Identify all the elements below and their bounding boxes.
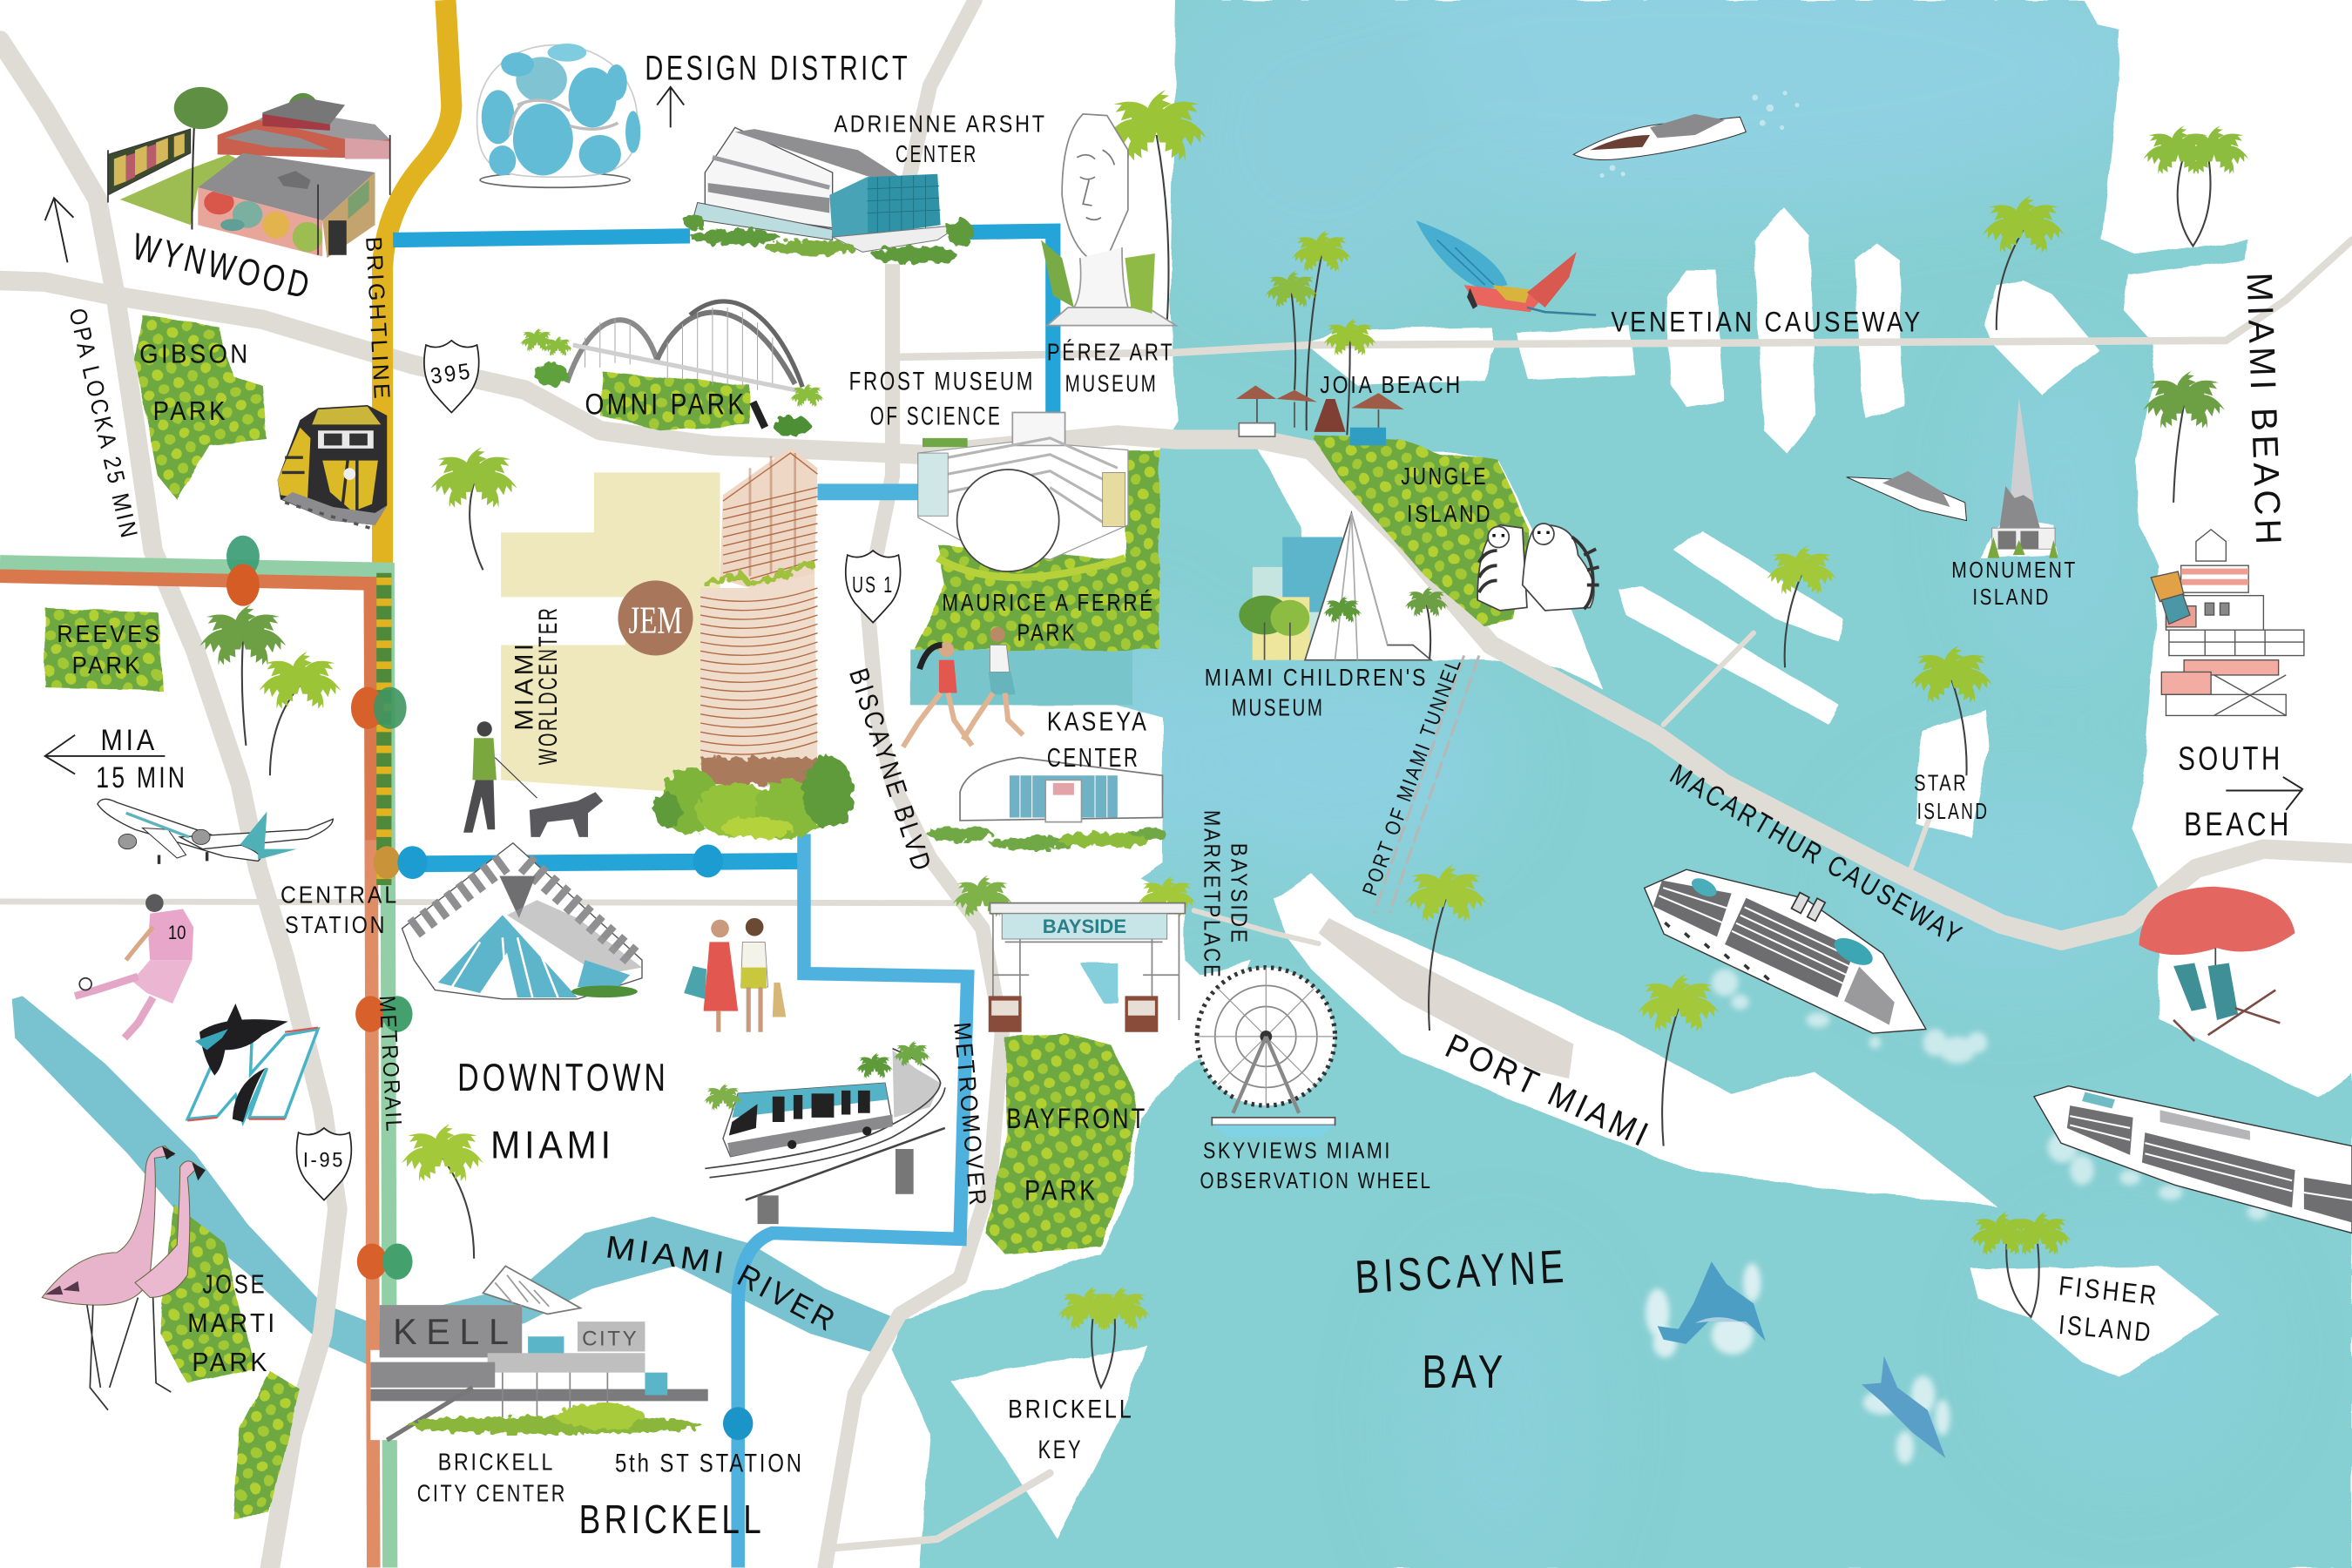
road: NE 1st street: [0, 902, 960, 903]
icon: yacht splash: [1599, 91, 1799, 178]
letter M: [187, 1029, 318, 1122]
label: Bayside Marketplace: BAYSIDE: [1227, 843, 1251, 945]
shield: I-95: I-95: [303, 1149, 345, 1173]
Maurice A Ferre Park: [914, 450, 1159, 650]
label: Wynwood: WYNWOOD: [129, 226, 316, 308]
label: Bayside Marketplace: MARKETPLACE: [1200, 810, 1224, 979]
label: Fisher Island: FISHER: [2058, 1270, 2160, 1311]
label: South Beach: BEACH: [2184, 807, 2292, 843]
shield: US 1: US 1: [852, 573, 894, 598]
Jose Marti Park: [160, 1203, 255, 1383]
Metrorail orange upper: [0, 576, 372, 840]
icon: Children's Museum: [1239, 513, 1431, 660]
label: Bayfront Park: [1006, 1102, 1147, 1206]
icon: JEM tower: [700, 447, 817, 765]
icon: beach umbrella and chairs: [2139, 887, 2295, 1041]
Port of Miami tunnel: [1374, 656, 1479, 914]
icon: lemurs: [1477, 524, 1599, 611]
panel: station dots: [226, 536, 753, 1440]
icon: Joia Beach cabanas: [1236, 386, 1404, 445]
label: Miami Worldcenter: WORLDCENTER: [535, 606, 563, 765]
label: Monument Island: MONUMENT: [1951, 558, 2078, 583]
label: Central Station: [280, 882, 399, 938]
label: Skyviews Miami Observation Wheel: OBSERVATION WHEEL: [1200, 1169, 1432, 1193]
icon: Frost Museum of Science: [918, 413, 1128, 578]
Metromover spur: [817, 487, 918, 497]
label: Central Station: CENTRAL: [280, 882, 399, 909]
label: Reeves Park: PARK: [72, 652, 143, 679]
icon: shoppers: [684, 918, 786, 1032]
label: Miami Worldcenter: MIAMI: [510, 640, 538, 731]
label: Bayfront Park: PARK: [1024, 1174, 1098, 1206]
icon: JEM logo badge: [618, 580, 693, 656]
label: MIA 15 min: MIA: [100, 724, 158, 757]
label: Brickell: BRICKELL: [579, 1497, 765, 1542]
label: Maurice A Ferre Park: MAURICE A FERRÉ: [942, 589, 1155, 616]
label: Reeves Park: REEVES: [57, 620, 162, 647]
label: Perez Art Museum: [1047, 338, 1174, 396]
marlin spear: [233, 1068, 266, 1122]
engines: [118, 829, 210, 849]
label: Design District: DESIGN DISTRICT: [645, 49, 910, 87]
label: Fisher Island: [2058, 1270, 2160, 1348]
label: Miami Worldcenter: [510, 606, 563, 765]
icon: Brightline train: [278, 405, 387, 530]
label: Gibson Park: GIBSON: [139, 339, 251, 369]
kicking leg: [75, 977, 138, 996]
Jose Marti Park south: [233, 1371, 300, 1518]
icon: Bayside Marketplace gate: BAYSIDE: [1043, 916, 1126, 937]
label: Brickell Key: BRICKELL: [1008, 1396, 1134, 1423]
arrow: South Beach east: [2226, 777, 2302, 810]
icon: soccer player: [75, 894, 193, 1038]
label: Gibson Park: [139, 339, 251, 426]
label: Maurice A Ferre Park: PARK: [1017, 618, 1077, 645]
top building: [262, 98, 345, 125]
Monument Island: [1980, 517, 2058, 558]
label: Star Island: [1914, 771, 1989, 824]
label: Star Island: ISLAND: [1917, 800, 1989, 824]
main building mural wall: [198, 187, 322, 256]
mural fence: [108, 129, 191, 195]
marina water at Bayside: [1080, 963, 1118, 1002]
Bayfront Park: [985, 1033, 1136, 1254]
label: Downtown Miami: [457, 1056, 669, 1166]
shield: I-395: [424, 341, 479, 413]
head: [145, 894, 164, 912]
label: Miami River: [604, 1228, 844, 1340]
arrow: Design District north: [657, 87, 684, 127]
icon: Bayside Marketplace gate: [989, 903, 1185, 1032]
label: Perez Art Museum: PÉREZ ART: [1047, 338, 1174, 365]
label: Star Island: STAR: [1914, 771, 1968, 795]
road: Opa Locka / I-95: [0, 40, 337, 1567]
standing leg: [125, 997, 153, 1038]
icon: parrot: [1416, 220, 1596, 315]
icon: Design District fly dome: [477, 44, 640, 187]
panel: Biscayne Bay water: [893, 0, 2352, 1568]
label: Adrienne Arsht Center: ADRIENNE ARSHT: [834, 111, 1047, 138]
label: Jose Marti Park: MARTI: [187, 1308, 278, 1338]
icon: Metromover train: [704, 1040, 945, 1224]
label: South Beach: [2178, 740, 2292, 843]
icon: tower foliage: [654, 756, 854, 840]
label: Metromover: METROMOVER: [949, 1021, 992, 1209]
white base covering line: [690, 210, 960, 264]
Brightline shared dashes: [380, 578, 389, 885]
label: Jose Marti Park: JOSE: [202, 1268, 267, 1299]
icon: flamingos: [42, 1146, 206, 1410]
icon: diving dolphin: [1862, 1356, 1950, 1464]
landing gear: [159, 852, 207, 864]
label: MacArthur Causeway: MACARTHUR CAUSEWAY: [1665, 757, 1970, 952]
Port Miami island: [1274, 873, 1997, 1206]
panel: parks: [45, 315, 1529, 1518]
label: Jungle Island: ISLAND: [1407, 500, 1492, 527]
Reeves Park: [45, 607, 162, 690]
label: Metrorail: METRORAIL: [375, 995, 406, 1134]
icon: soccer player: 10: [168, 922, 186, 943]
road: Star Island bridge: [1911, 819, 1929, 868]
Gibson Park: [135, 315, 267, 499]
label: Monument Island: [1951, 558, 2078, 610]
label: Kaseya Center: [1047, 706, 1149, 773]
road: Port Boulevard: [1194, 910, 1319, 943]
teal tail: [240, 812, 267, 855]
icon: airplane: [98, 799, 333, 864]
pink jersey: [148, 909, 193, 960]
arm: [126, 927, 153, 960]
pillars: [758, 1149, 914, 1224]
icon: Kaseya Center arena: [927, 758, 1166, 850]
shield: I-395: 395: [429, 359, 474, 389]
Jungle Island: [1311, 435, 1529, 625]
teal waterway by runners: [910, 650, 1132, 705]
icon: cruise ship splashes: [1712, 969, 2268, 1220]
label: Brickell Key: KEY: [1038, 1436, 1083, 1464]
road: Venetian Causeway: [900, 240, 2352, 357]
icon: runners: [903, 627, 1023, 747]
label: MIA 15 min: 15 MIN: [96, 761, 187, 794]
icon: lifeguard tower: [2151, 530, 2304, 715]
Miami Worldcenter block: [501, 472, 720, 795]
Miami River: [12, 996, 900, 1367]
dorsal fin: [225, 1004, 245, 1026]
label: Joia Beach: JOIA BEACH: [1320, 371, 1463, 398]
label: Monument Island: ISLAND: [1972, 585, 2051, 610]
track: [705, 1049, 945, 1178]
label: MIA 15 min: [96, 724, 187, 794]
label: Venetian Causeway: VENETIAN CAUSEWAY: [1611, 306, 1923, 338]
icon: man walking dog: [463, 721, 603, 837]
Metromover loop: [738, 834, 968, 1567]
label: Adrienne Arsht Center: CENTER: [896, 140, 978, 167]
label: Miami River: MIAMI: [604, 1228, 730, 1281]
label: Miami River: RIVER: [732, 1257, 844, 1340]
fuselage: [98, 799, 260, 861]
label: Jungle Island: [1401, 463, 1492, 527]
label: Reeves Park: [57, 620, 162, 679]
Metrorail orange line: [0, 576, 374, 1567]
road: I-395 and MacArthur Causeway: [0, 280, 2352, 941]
tail plane: [258, 849, 297, 860]
label: Kaseya Center: CENTER: [1047, 742, 1140, 773]
label: Brickell Key: [1008, 1396, 1134, 1464]
road: Palm Island bridge: [1664, 633, 1754, 725]
icon: Omni bridge arches: [520, 301, 824, 436]
label: Central Station: STATION: [285, 911, 387, 938]
icon: Brickell City Centre: [370, 1266, 708, 1440]
Palm and Hibiscus islands: [1619, 530, 1843, 725]
icon: Brickell City Centre: KELL: [393, 1312, 513, 1352]
label: Bayside Marketplace: [1200, 810, 1251, 979]
icon: wheel: [1197, 968, 1335, 1137]
train body: [723, 1083, 893, 1157]
icon: Wynwood walls buildings: [108, 87, 390, 258]
main wing: [180, 819, 333, 849]
road: Brickell Key bridge: [833, 1473, 1050, 1548]
label: Skyviews Miami Observation Wheel: SKYVIEWS MIAMI: [1203, 1139, 1392, 1163]
label: Brightline: BRIGHTLINE: [361, 236, 394, 402]
arrow: MIA west: [45, 735, 165, 774]
label: Brickell City Center: BRICKELL: [438, 1449, 555, 1476]
ball: [79, 978, 91, 990]
Metromover central line: [405, 861, 804, 864]
Watson Island: [1259, 450, 1604, 690]
rear mural building: [218, 120, 390, 159]
arrow: Wynwood north: [45, 198, 73, 262]
palm trunks: [242, 135, 2211, 1388]
label: Omni Park: OMNI PARK: [585, 388, 747, 421]
label: Downtown Miami: MIAMI: [490, 1123, 615, 1166]
panel: transit lines: [0, 0, 1053, 1567]
icon: cruise ship near Port Miami: [1630, 824, 1957, 1064]
label: Downtown Miami: DOWNTOWN: [457, 1056, 669, 1099]
icon: Perez Art Museum statue head: [1041, 114, 1176, 326]
label: Bayfront Park: BAYFRONT: [1006, 1102, 1147, 1134]
main building roof: [198, 153, 375, 220]
icon: Central station building: [402, 843, 642, 999]
icon: Adrienne Arsht Center: [684, 127, 974, 264]
red edge: [187, 1028, 318, 1120]
label: Port of Miami Tunnel: PORT OF MIAMI TUNNEL: [1358, 654, 1467, 899]
right mural wall: [322, 172, 375, 258]
label: Maurice A Ferre Park: [942, 589, 1155, 645]
label: Miami Children's Museum: MIAMI CHILDREN'S: [1205, 664, 1428, 691]
Venetian Islands: [1307, 207, 2099, 453]
label: Fisher Island: ISLAND: [2058, 1309, 2154, 1348]
label: Jose Marti Park: PARK: [192, 1347, 270, 1377]
panel: palm trees: [199, 88, 2248, 1388]
label: Biscayne Bay: BISCAYNE: [1354, 1241, 1569, 1303]
shared corridor: [380, 573, 389, 885]
Brickell Key: [952, 1346, 1147, 1539]
label: Miami Beach: MIAMI BEACH: [2239, 272, 2288, 549]
icon: cruise ship bottom right: [2034, 1086, 2352, 1233]
panel: white islands: [952, 207, 2219, 1539]
label: Port Miami: PORT MIAMI: [1440, 1027, 1657, 1155]
label: Gibson Park: PARK: [153, 395, 228, 426]
label: Brickell City Center: [417, 1449, 567, 1507]
lawn: [120, 154, 251, 225]
icon: Marlins logo: [187, 1004, 318, 1122]
label: Frost Museum of Science: FROST MUSEUM: [849, 368, 1035, 396]
label: Miami Children's Museum: [1205, 664, 1428, 720]
shield: US 1: [846, 551, 901, 623]
teal fin: [195, 1029, 228, 1050]
label: Jungle Island: JUNGLE: [1401, 463, 1488, 490]
icon: top yacht: [1573, 114, 1746, 160]
ramp: [893, 1050, 941, 1118]
shorts: [132, 960, 192, 1004]
label: Biscayne Bay: [1354, 1241, 1569, 1398]
icon: jumping dolphin: [1646, 1261, 1766, 1357]
label: Perez Art Museum: MUSEUM: [1065, 369, 1158, 396]
icon: small yacht: [1847, 471, 1966, 521]
road: Biscayne Boulevard: [825, 0, 1002, 1567]
icon: Monument Island obelisk: [1988, 397, 2058, 558]
Port Miami terminal pad: [1319, 918, 1573, 1078]
label: South Beach: SOUTH: [2178, 740, 2283, 777]
Brightline line: [382, 0, 451, 565]
Omni Park: [600, 372, 750, 430]
label: Biscayne Blvd: BISCAYNE BLVD: [843, 665, 938, 876]
Star Island: [1916, 710, 1989, 837]
trees: [192, 108, 195, 229]
label: Brickell City Center: CITY CENTER: [417, 1480, 567, 1507]
cheatline: [126, 813, 189, 837]
label: Adrienne Arsht Center: [834, 111, 1047, 167]
icon: Brickell City Centre: CITY: [582, 1328, 639, 1351]
label: Miami Children's Museum: MUSEUM: [1232, 693, 1324, 720]
label: Frost Museum of Science: [849, 368, 1035, 430]
marlin body: [199, 1019, 288, 1076]
label: Opa Locka 25 min: OPA LOCKA 25 MIN: [64, 306, 144, 543]
icon: JEM logo badge: JEM: [628, 598, 682, 642]
front wing: [143, 828, 186, 858]
shield: I-95: [297, 1128, 351, 1200]
label: Kaseya Center: KASEYA: [1047, 706, 1149, 737]
Metromover top line: [393, 231, 1053, 440]
Fisher Island: [1971, 1266, 2219, 1379]
label: 5th St Station: 5th ST STATION: [615, 1450, 804, 1477]
label: Jose Marti Park: [187, 1268, 278, 1377]
label: Frost Museum of Science: OF SCIENCE: [870, 402, 1002, 430]
label: Skyviews Miami Observation Wheel: [1200, 1139, 1432, 1193]
Metrorail green line: [0, 563, 390, 1567]
label: Biscayne Bay: BAY: [1422, 1347, 1508, 1398]
